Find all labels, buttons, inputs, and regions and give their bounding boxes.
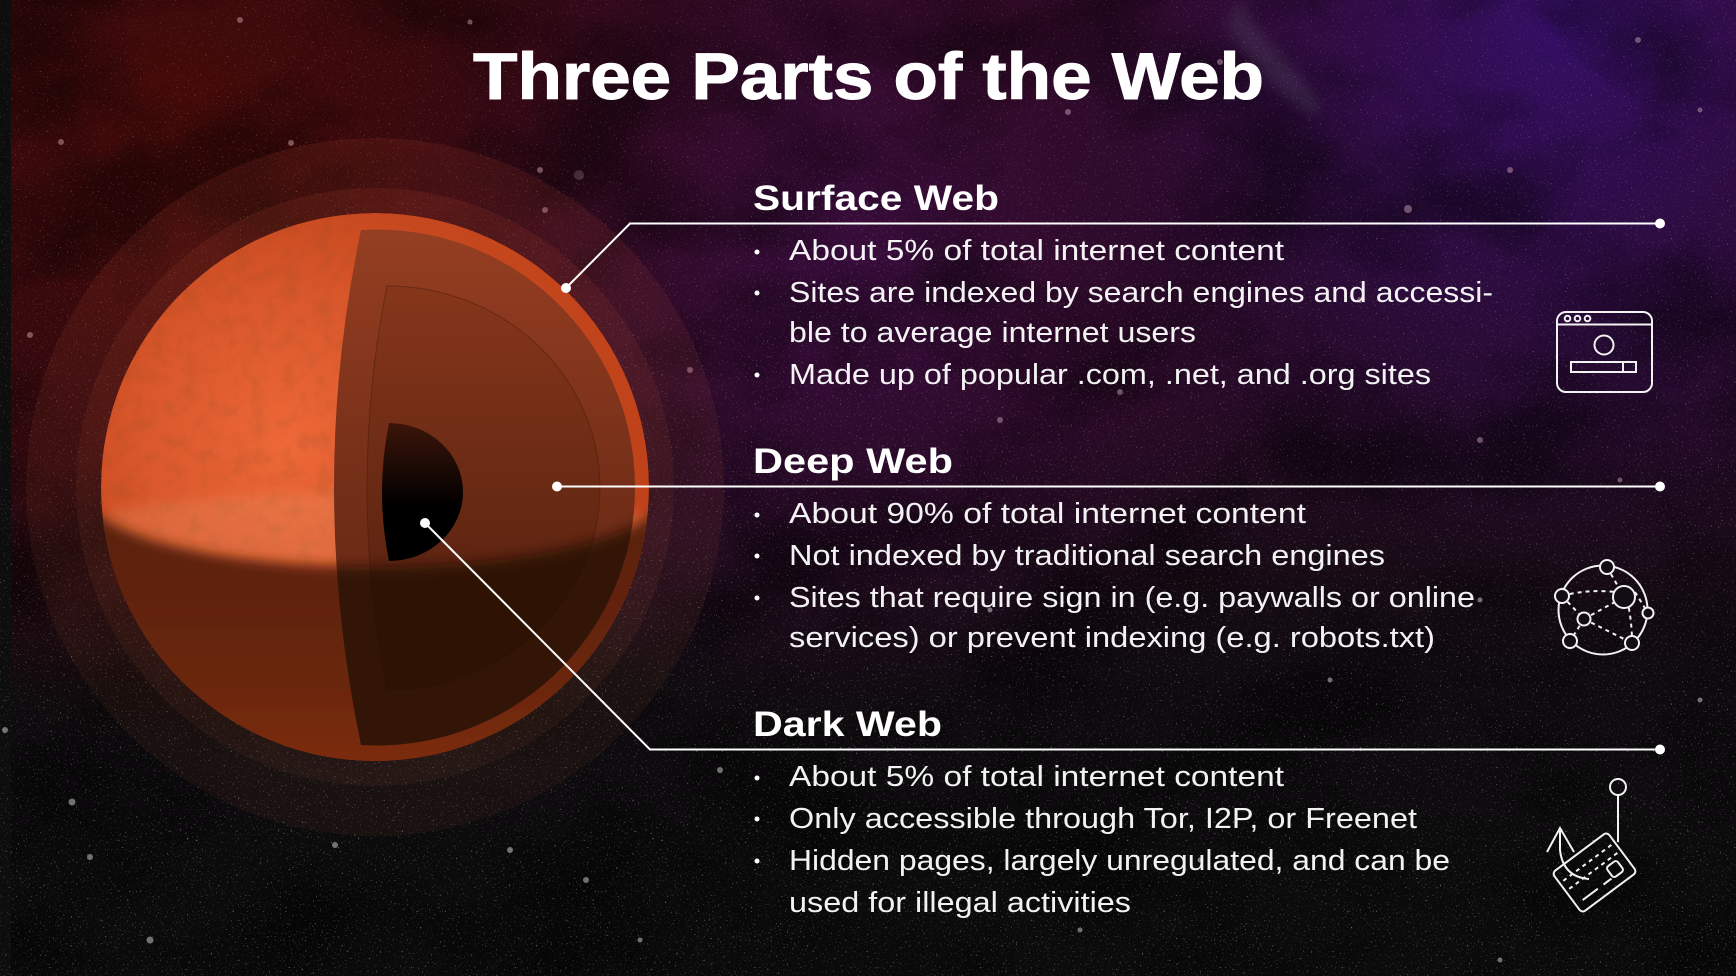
- connector: surface web: [566, 224, 1660, 288]
- bullets: surface web: Made up of popular .com, .net, and .org sites: [789, 359, 1431, 391]
- bullets: surface web: [754, 235, 1493, 391]
- bullets: dark web: About 5% of total internet content: [789, 761, 1284, 793]
- panel: dark web: [753, 705, 1637, 919]
- heading: dark web: Dark Web: [753, 705, 942, 744]
- title: Three Parts of the Web: [473, 39, 1264, 113]
- icon: browser window: [1557, 312, 1652, 392]
- outer halo ring: [26, 138, 724, 836]
- bullets: deep web: [754, 498, 1475, 654]
- connector: deep web: [557, 486, 1660, 488]
- planet surface: [101, 213, 649, 761]
- bullets: dark web: used for illegal activities: [789, 887, 1131, 919]
- mantle layer: [334, 230, 635, 745]
- icon: network globe: [1555, 560, 1654, 654]
- icon: phishing hook and credit card: [1547, 779, 1637, 913]
- bullets: dark web: Hidden pages, largely unregulated, and can be: [789, 845, 1450, 877]
- connector: dark web: [425, 523, 1660, 750]
- bullets: surface web: ble to average internet users: [789, 317, 1196, 349]
- panel: surface web: [753, 179, 1652, 392]
- bullets: dark web: [754, 761, 1450, 919]
- bullets: dark web: Only accessible through Tor, I2P, or Freenet: [789, 803, 1417, 835]
- mantle shadow: [336, 518, 633, 746]
- connector lines: [425, 224, 1660, 750]
- connector dots: [420, 218, 1665, 754]
- bullets: deep web: Sites that require sign in (e.g. paywalls or online: [789, 582, 1475, 614]
- bullets: surface web: About 5% of total internet content: [789, 235, 1284, 267]
- bullets: deep web: services) or prevent indexing (e.g. robots.txt): [789, 622, 1435, 654]
- bullets: deep web: Not indexed by traditional search engines: [789, 540, 1385, 572]
- planet cross-section: [26, 138, 724, 836]
- bullets: surface web: Sites are indexed by search engines and accessi-: [789, 277, 1493, 309]
- heading: surface web: Surface Web: [753, 179, 999, 218]
- inner halo ring: [76, 188, 674, 786]
- bullets: deep web: About 90% of total internet content: [789, 498, 1306, 530]
- dark core: [382, 423, 463, 561]
- inner mantle layer: [367, 286, 600, 690]
- heading: deep web: Deep Web: [753, 442, 953, 481]
- panel: deep web: [753, 442, 1654, 654]
